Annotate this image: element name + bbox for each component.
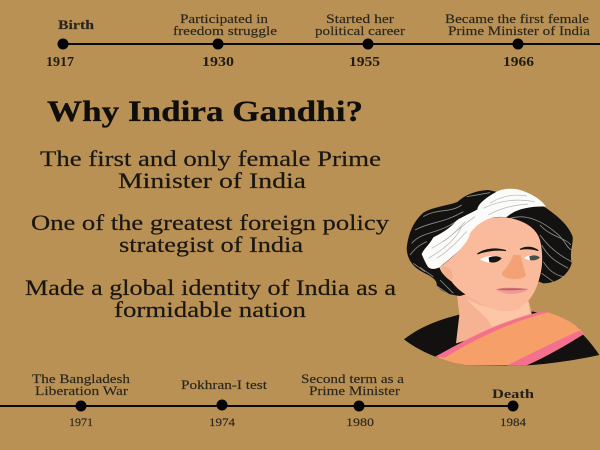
event: political career 1955: political career [315,24,406,38]
event: freedom struggle 1930: 1930 [202,54,234,69]
ear [442,267,453,279]
event: first female PM 1966: Prime Minister of India [448,24,591,38]
face [439,217,542,311]
eyes [480,256,502,262]
text: first female PM: The first and only female Prime [40,146,381,171]
event: Pokhran-I test 1974: 1974 [209,415,235,429]
saree [436,312,584,365]
event: Pokhran-I test 1974: Pokhran-I test [181,378,268,392]
eyebrows [477,249,506,254]
event: second term 1980: Second term as a [301,372,405,386]
text: global identity [25,275,396,322]
event: Birth 1917 [46,18,94,69]
event: political career 1955: Started her [326,12,395,26]
mouth [496,288,528,294]
text: foreign policy strategist [31,210,389,257]
text: first female PM: Minister of India [118,168,306,193]
portrait of Indira Gandhi [404,189,599,365]
saree pink border [435,311,584,365]
event: freedom struggle 1930: freedom struggle [173,24,278,38]
text: foreign policy strategist: strategist of India [119,232,303,257]
hair strands [410,193,572,295]
event: Death 1984 [492,386,535,429]
event: Birth 1917: 1917 [46,54,74,69]
event: Bangladesh Liberation War 1971 [32,372,131,429]
event: Pokhran-I test 1974 [181,378,268,429]
event: second term 1980: 1980 [346,415,374,429]
event: Death 1984: Death [492,386,535,401]
bottom timeline [0,372,535,429]
event: freedom struggle 1930: Participated in [180,12,269,26]
text: global identity: Made a global identity of India as a [25,275,396,300]
event: Death 1984: 1984 [500,415,526,429]
event: first female PM 1966: 1966 [503,54,534,69]
top timeline axis [62,43,600,45]
event: Bangladesh Liberation War 1971: Liberation War [35,384,129,398]
event: political career 1955 [315,12,406,69]
nose [502,255,526,279]
event: Birth 1917: Birth [58,18,94,32]
hair back [407,190,573,296]
bottom timeline axis [0,405,513,407]
text: foreign policy strategist: One of the greatest foreign policy [31,210,389,235]
event: first female PM 1966: Became the first female [445,12,590,26]
black blouse [404,312,599,365]
event: Bangladesh Liberation War 1971: The Bangladesh [32,372,131,386]
event: freedom struggle 1930 [173,12,278,69]
text: global identity: formidable nation [114,297,306,322]
top timeline [46,12,600,69]
neck [456,290,533,343]
event: Bangladesh Liberation War 1971: 1971 [69,415,93,429]
title: Why Indira Gandhi? [47,95,363,128]
event: second term 1980 [301,372,405,429]
event: second term 1980: Prime Minister [309,384,401,398]
text: first female PM [40,146,381,193]
event: first female PM 1966 [445,12,591,69]
white hair [422,189,546,269]
event: political career 1955: 1955 [349,54,380,69]
